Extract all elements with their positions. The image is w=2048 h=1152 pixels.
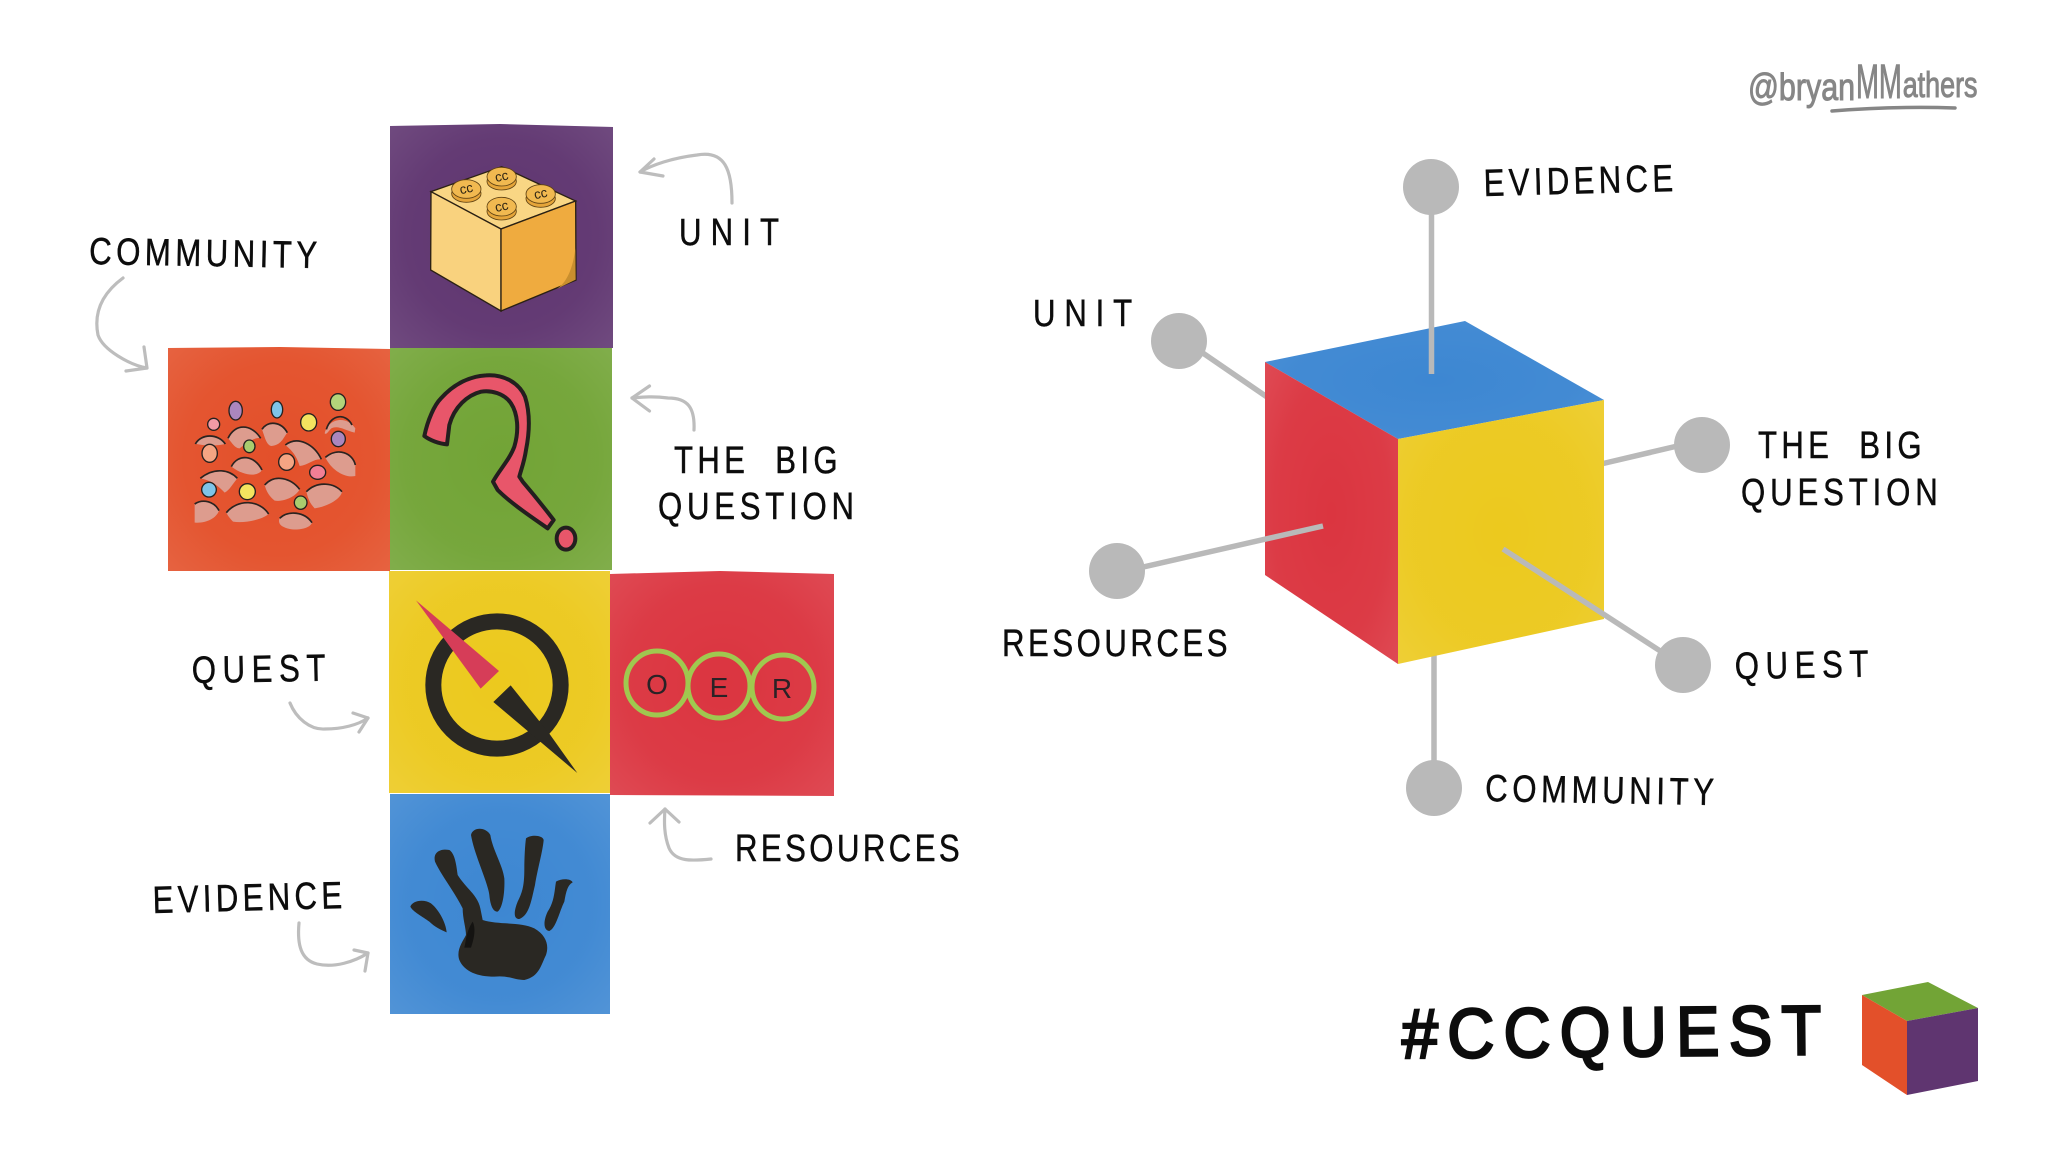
icon: lego brick [431,167,576,311]
arrow: community [97,278,147,371]
icon: lego brick: cc [458,180,475,197]
icon: small cube [1862,982,1978,1095]
label: QUESTION: QUESTION [658,486,854,528]
cube face: right (yellow) [1398,400,1604,664]
icon: OER circles [626,651,814,719]
icon: question mark [424,375,575,550]
cube face: top (blue) [1265,321,1604,439]
icon: handprint [410,829,573,980]
arrow: unit [640,154,732,203]
icon: lego brick: cc [532,185,549,202]
connector: resources line [1130,526,1323,570]
arrow: resources [650,809,711,860]
tile: the big question (green) [390,348,612,570]
connector: unit line behind cube [1197,349,1267,397]
signature: @bryan [1748,67,1855,109]
signature: athers [1903,66,1978,106]
node: quest [1655,637,1711,693]
icon: OER circles: R [772,673,792,704]
label: QUESTION: QUESTION [1741,472,1938,514]
connector: evidence line [1429,200,1434,374]
signature [1748,56,1978,111]
icon: Q compass logo [416,600,577,773]
tile: resources (red) [610,571,834,796]
panel: assembled cube [1265,321,1604,664]
label: THE BIG: THE BIG [1758,425,1922,467]
icon: OER circles: E [710,672,728,703]
node: community [1406,760,1462,816]
label: UNIT: UNIT [679,212,779,254]
label: QUEST: QUEST [1734,644,1869,688]
label: RESOURCES: RESOURCES [1002,623,1228,665]
tile: quest (yellow) [389,571,610,793]
label: EVIDENCE: EVIDENCE [152,875,343,922]
label: COMMUNITY: COMMUNITY [1485,768,1714,814]
hashtag: #CCQUEST: #CCQUEST [1401,992,1822,1074]
connector: community line behind cube [1431,650,1437,770]
signature: MM [1856,56,1902,109]
icon: lego brick: cc [493,167,510,185]
connector: the big question line behind cube [1601,444,1686,464]
connector: quest line [1503,549,1668,656]
tile: unit (purple) [390,124,613,348]
node: the big question [1674,417,1730,473]
label: THE BIG: THE BIG [674,440,838,482]
label: RESOURCES: RESOURCES [735,828,960,870]
arrow: evidence [299,923,368,971]
panel: unfolded cube net [168,124,834,1014]
cube face: left (red) [1265,362,1398,664]
icon: lego brick: cc [493,197,510,215]
tile: community (orange) [168,347,390,571]
node: unit [1151,313,1207,369]
icon: OER circles: O [646,669,668,700]
label: QUEST: QUEST [191,648,326,692]
arrow: big question [632,386,694,430]
tile: evidence (blue) [390,794,610,1014]
node: evidence [1403,159,1459,215]
icon: crowd of people [195,394,355,530]
arrow: quest [290,703,368,732]
label: COMMUNITY: COMMUNITY [89,231,317,277]
label: EVIDENCE: EVIDENCE [1483,158,1674,205]
label: UNIT: UNIT [1033,293,1132,335]
node: resources [1089,543,1145,599]
